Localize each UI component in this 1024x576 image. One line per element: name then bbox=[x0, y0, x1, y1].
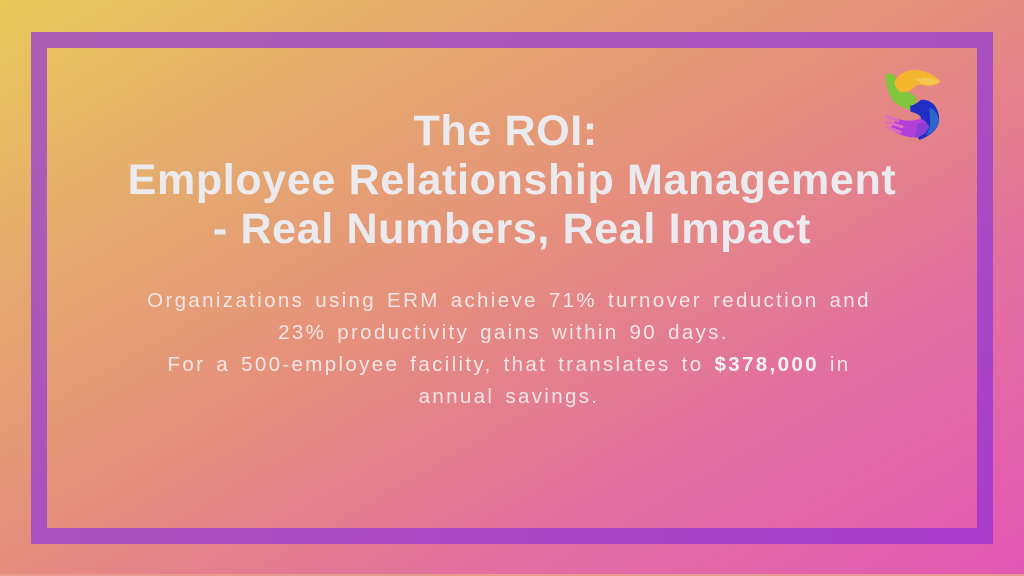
title: The ROI: bbox=[414, 107, 598, 155]
body text: 23% productivity gains within 90 days. bbox=[278, 321, 729, 344]
body text: annual savings. bbox=[419, 385, 599, 408]
bottom edge highlight bbox=[0, 574, 1024, 576]
body text: Organizations using ERM achieve 71% turnover reduction and bbox=[147, 289, 871, 312]
body text bbox=[147, 289, 871, 408]
title: Employee Relationship Management bbox=[128, 156, 896, 204]
title: - Real Numbers, Real Impact bbox=[213, 205, 811, 253]
body text: For a 500-employee facility, that translates to $378,000 in bbox=[167, 353, 851, 376]
title bbox=[128, 107, 896, 253]
icon: colorful S logo bbox=[885, 70, 941, 140]
